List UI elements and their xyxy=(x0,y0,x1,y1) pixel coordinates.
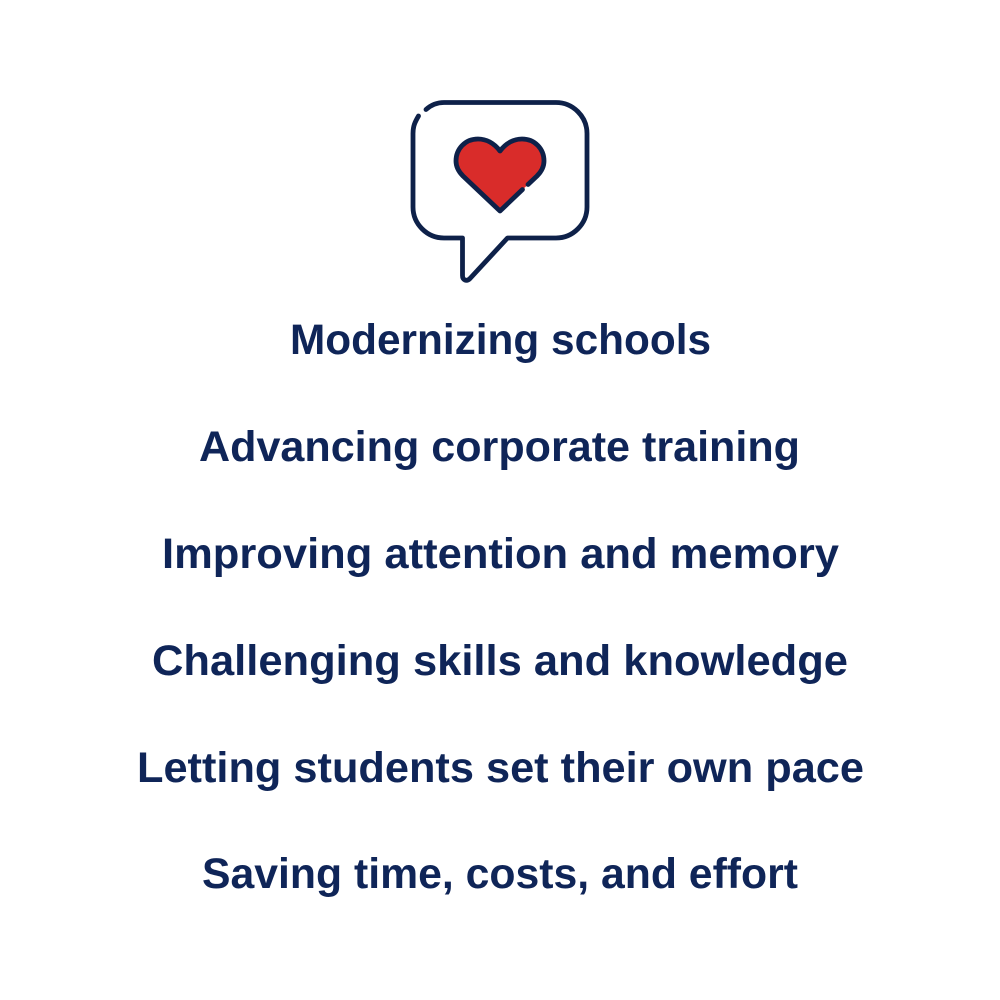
text: Saving time, costs, and effort: Saving time, costs, and effort xyxy=(202,851,798,898)
icon: heart xyxy=(456,139,544,211)
text: Advancing corporate training: Advancing corporate training xyxy=(199,424,800,471)
text: Modernizing schools: Modernizing schools xyxy=(290,317,711,364)
text: Challenging skills and knowledge: Challenging skills and knowledge xyxy=(152,638,848,685)
text: Improving attention and memory: Improving attention and memory xyxy=(162,531,839,578)
icon: speech bubble outline xyxy=(413,102,587,280)
text: Letting students set their own pace: Letting students set their own pace xyxy=(137,745,864,792)
icon: speech bubble with heart xyxy=(413,102,587,280)
